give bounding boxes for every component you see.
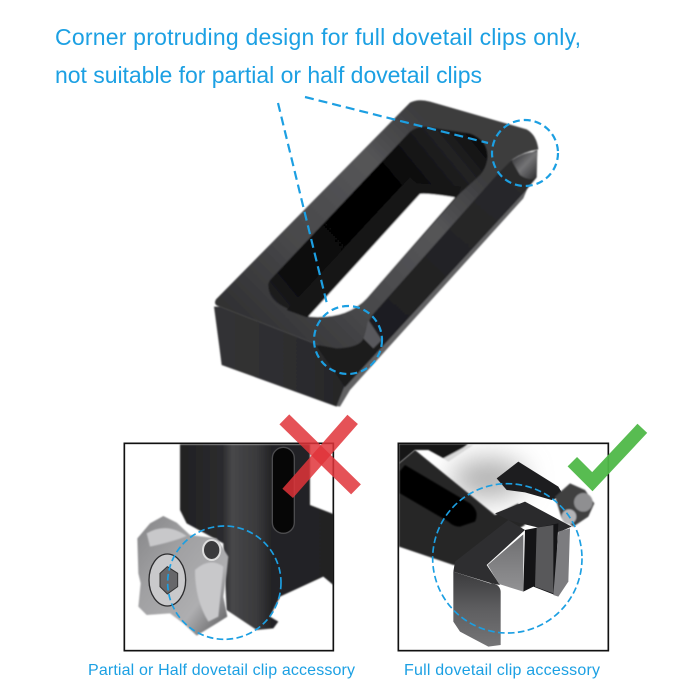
green check icon [572,428,642,482]
panel: full dovetail accessory [398,428,642,651]
clip right tooth [553,528,570,597]
top face [215,100,538,348]
right side face [317,150,537,387]
dashed highlight circle [168,526,281,639]
clip channel [523,523,558,595]
lower bright edge [337,189,527,407]
corner notch right [512,152,537,179]
top rail pieces [399,444,473,463]
heading text: Corner protruding design for full dovetail clips only, [55,24,581,50]
product photo: dovetail rail stop [214,100,538,407]
screw [555,483,594,527]
recess ledge [287,177,462,317]
through hole [308,194,455,317]
dashed callout lines and circles on product [278,97,558,374]
plate slot [272,447,294,533]
photo frame [124,443,333,651]
soft shadow behind clip [452,458,525,498]
panel: partial or half dovetail accessory [124,419,356,651]
corner notch left [363,320,382,348]
front face [214,307,377,407]
clip centre face [488,534,523,592]
clip left tooth [453,572,501,647]
clip top face [453,520,525,585]
red cross icon [284,419,356,493]
dark plate [180,444,333,630]
caption: partial or half dovetail: Partial or Half dovetail clip accessory [88,662,355,679]
heading text [55,24,581,88]
lever [497,462,563,500]
photo background [398,443,608,651]
dashed highlight circle [433,484,582,633]
plate slot [400,465,477,527]
frame border [398,443,608,651]
channel inner [535,525,553,593]
caption: full dovetail: Full dovetail clip accessory [404,662,600,679]
wedge top [495,502,572,532]
silver knob [137,516,228,636]
heading text: not suitable for partial or half dovetail clips [55,62,482,88]
knob hex socket [149,554,186,606]
slotted plate [399,450,525,565]
recess [268,127,488,317]
silver rail [443,445,473,462]
knob highlights [147,528,223,622]
frame border [124,443,333,651]
knob bolt [203,540,220,560]
